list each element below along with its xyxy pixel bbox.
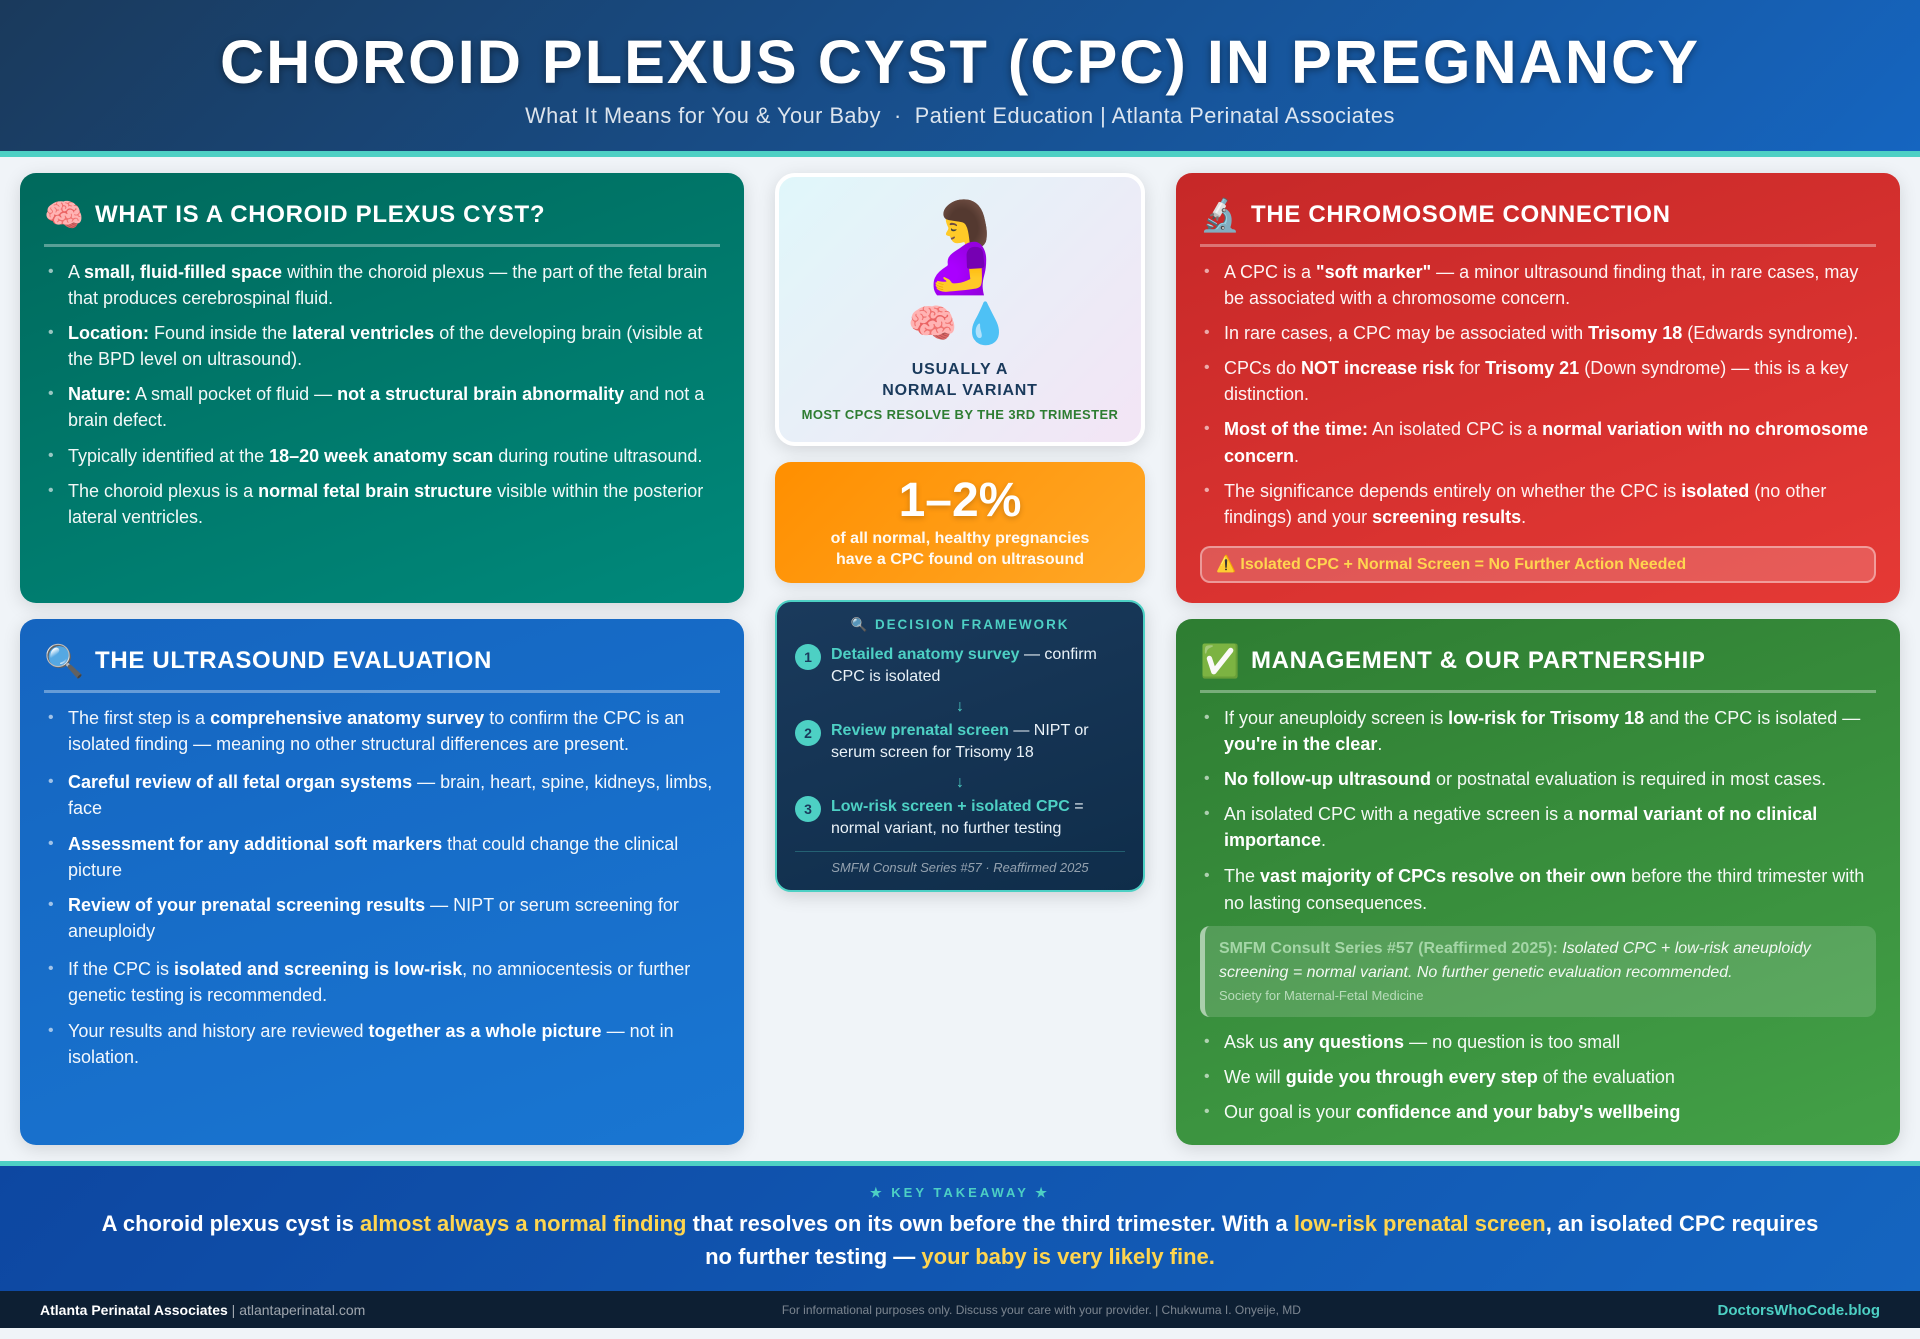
takeaway message: no further testing — your baby is very likely fine. xyxy=(705,1244,1215,1269)
panel heading xyxy=(44,643,492,679)
bullet list: management: The vast majority of CPCs resolve on their own before the third trimester with no lasting consequences. xyxy=(1224,866,1864,913)
step 3: 3 xyxy=(804,801,812,817)
callout: no further action xyxy=(1200,546,1876,583)
icon: pregnant woman: 🤰 xyxy=(905,196,1015,296)
callout: SMFM guidance xyxy=(1200,926,1876,1017)
step 3: Low-risk screen + isolated CPC = normal variant, no further testing xyxy=(831,798,1084,837)
panel: prevalence statistic xyxy=(775,462,1145,583)
panel heading xyxy=(44,197,545,233)
bullet list: definition: Nature: A small pocket of fluid — not a structural brain abnormality and not a brain defect. xyxy=(68,384,704,430)
panel: decision framework xyxy=(775,600,1145,892)
statistic description: have a CPC found on ultrasound xyxy=(836,551,1084,568)
hero subcaption: MOST CPCS RESOLVE BY THE 3RD TRIMESTER xyxy=(802,406,1118,422)
statistic description: of all normal, healthy pregnancies xyxy=(831,530,1089,547)
bullet list: partnership: Our goal is your confidence and your baby's wellbeing xyxy=(1224,1102,1680,1122)
bullet list: chromosomes: CPCs do NOT increase risk for Trisomy 21 (Down syndrome) — this is a key distinction. xyxy=(1224,358,1848,404)
framework heading: 🔍 DECISION FRAMEWORK xyxy=(851,617,1069,632)
takeaway message: A choroid plexus cyst is almost always a normal finding that resolves on its own before the third trimester. With a low-risk prenatal screen, an isolated CPC requires xyxy=(102,1211,1818,1236)
key takeaway banner xyxy=(0,1161,1920,1291)
panel heading xyxy=(1200,197,1671,233)
framework citation: SMFM Consult Series #57 · Reaffirmed 2025 xyxy=(831,860,1089,874)
bullet list: definition: A small, fluid-filled space within the choroid plexus — the part of the fetal brain that produces cerebrospinal fluid. xyxy=(68,262,707,308)
subtitle: What It Means for You & Your Baby · Patient Education | Atlanta Perinatal Associates xyxy=(525,103,1395,128)
panel heading: 🔬 xyxy=(1200,197,1240,233)
header banner xyxy=(0,0,1920,157)
callout: SMFM guidance: Society for Maternal-Fetal Medicine xyxy=(1219,988,1423,1003)
footer practice name: Atlanta Perinatal Associates | atlantaperinatal.com xyxy=(40,1302,365,1318)
step 1: 1 xyxy=(804,649,812,665)
panel heading: THE ULTRASOUND EVALUATION xyxy=(95,647,492,674)
takeaway label: ★ KEY TAKEAWAY ★ xyxy=(870,1185,1050,1200)
step 2: Review prenatal screen — NIPT or serum screen for Trisomy 18 xyxy=(831,722,1089,761)
panel heading xyxy=(1200,643,1706,679)
takeaway message xyxy=(102,1211,1818,1269)
hero caption xyxy=(882,361,1038,399)
bullet list: chromosomes: In rare cases, a CPC may be associated with Trisomy 18 (Edwards syndrome). xyxy=(1224,323,1858,343)
panel heading: 🔍 xyxy=(44,643,84,679)
step 2: 2 xyxy=(804,725,812,741)
hero caption: USUALLY A xyxy=(912,361,1008,378)
bullet list: evaluation: If the CPC is isolated and screening is low-risk, no amniocentesis or further genetic testing is recommended. xyxy=(68,959,690,1005)
bullet list: evaluation: Careful review of all fetal organ systems — brain, heart, spine, kidneys, limbs, face xyxy=(68,772,712,818)
bullet list: evaluation: Assessment for any additional soft markers that could change the clinical picture xyxy=(68,834,678,880)
panel heading: ✅ xyxy=(1200,643,1240,679)
callout: no further action: ⚠️ Isolated CPC + Normal Screen = No Further Action Needed xyxy=(1216,556,1686,573)
bullet list: evaluation: Review of your prenatal screening results — NIPT or serum screening for aneuploidy xyxy=(68,895,679,941)
bullet list: partnership: Ask us any questions — no question is too small xyxy=(1224,1032,1620,1052)
bullet list: definition xyxy=(48,262,707,527)
arrow: ↓ xyxy=(956,698,964,715)
footer blog link: DoctorsWhoCode.blog xyxy=(1718,1302,1880,1319)
framework citation xyxy=(795,850,1125,884)
bullet list: chromosomes: The significance depends entirely on whether the CPC is isolated (no other findings) and your screening results. xyxy=(1224,481,1826,527)
statistic number: 1–2% xyxy=(899,474,1021,527)
callout: SMFM guidance: SMFM Consult Series #57 (Reaffirmed 2025): Isolated CPC + low-risk aneuploidy screening = normal variant. No further genetic evaluation recommended. xyxy=(1219,940,1811,981)
panel heading: THE CHROMOSOME CONNECTION xyxy=(1251,201,1671,228)
bullet list: evaluation xyxy=(48,708,712,1067)
panel heading: 🧠 xyxy=(44,197,84,233)
panel: hero illustration xyxy=(775,173,1145,446)
footer xyxy=(0,1291,1920,1328)
bullet list: definition: The choroid plexus is a normal fetal brain structure visible within the posterior lateral ventricles. xyxy=(68,481,703,527)
arrow: ↓ xyxy=(956,774,964,791)
panel: what is a choroid plexus cyst xyxy=(20,173,744,603)
bullet list: chromosomes: Most of the time: An isolated CPC is a normal variation with no chromosome concern. xyxy=(1224,419,1868,466)
bullet list: partnership: We will guide you through every step of the evaluation xyxy=(1224,1067,1675,1087)
bullet list: chromosomes xyxy=(1204,262,1868,527)
step 1: Detailed anatomy survey — confirm CPC is isolated xyxy=(831,646,1097,685)
panel: the ultrasound evaluation xyxy=(20,619,744,1145)
bullet list: evaluation: Your results and history are reviewed together as a whole picture — not in isolation. xyxy=(68,1021,674,1067)
hero caption: NORMAL VARIANT xyxy=(882,382,1038,399)
bullet list: evaluation: The first step is a comprehensive anatomy survey to confirm the CPC is an isolated finding — meaning no other structural differences are present. xyxy=(68,708,684,754)
statistic description xyxy=(831,530,1089,568)
bullet list: definition: Typically identified at the 18–20 week anatomy scan during routine ultrasound. xyxy=(68,446,702,466)
bullet list: management xyxy=(1204,708,1864,913)
panel heading: MANAGEMENT & OUR PARTNERSHIP xyxy=(1251,647,1706,674)
icon: brain and water drop: 🧠 💧 xyxy=(908,302,1010,346)
title: CHOROID PLEXUS CYST (CPC) IN PREGNANCY xyxy=(220,28,1700,96)
panel heading: WHAT IS A CHOROID PLEXUS CYST? xyxy=(95,201,545,228)
bullet list: management: An isolated CPC with a negative screen is a normal variant of no clinical importance. xyxy=(1224,804,1817,850)
panel: the chromosome connection xyxy=(1176,173,1900,603)
panel: management and partnership xyxy=(1176,619,1900,1145)
bullet list: chromosomes: A CPC is a "soft marker" — a minor ultrasound finding that, in rare cases, may be associated with a chromosome concern. xyxy=(1224,262,1858,308)
bullet list: definition: Location: Found inside the lateral ventricles of the developing brain (visible at the BPD level on ultrasound). xyxy=(68,323,702,369)
footer disclaimer: For informational purposes only. Discuss your care with your provider. | Chukwuma I. Onyeije, MD xyxy=(782,1302,1301,1316)
bullet list: management: If your aneuploidy screen is low-risk for Trisomy 18 and the CPC is isolated — you're in the clear. xyxy=(1224,708,1860,754)
bullet list: management: No follow-up ultrasound or postnatal evaluation is required in most cases. xyxy=(1224,769,1826,789)
bullet list: partnership xyxy=(1204,1032,1680,1122)
